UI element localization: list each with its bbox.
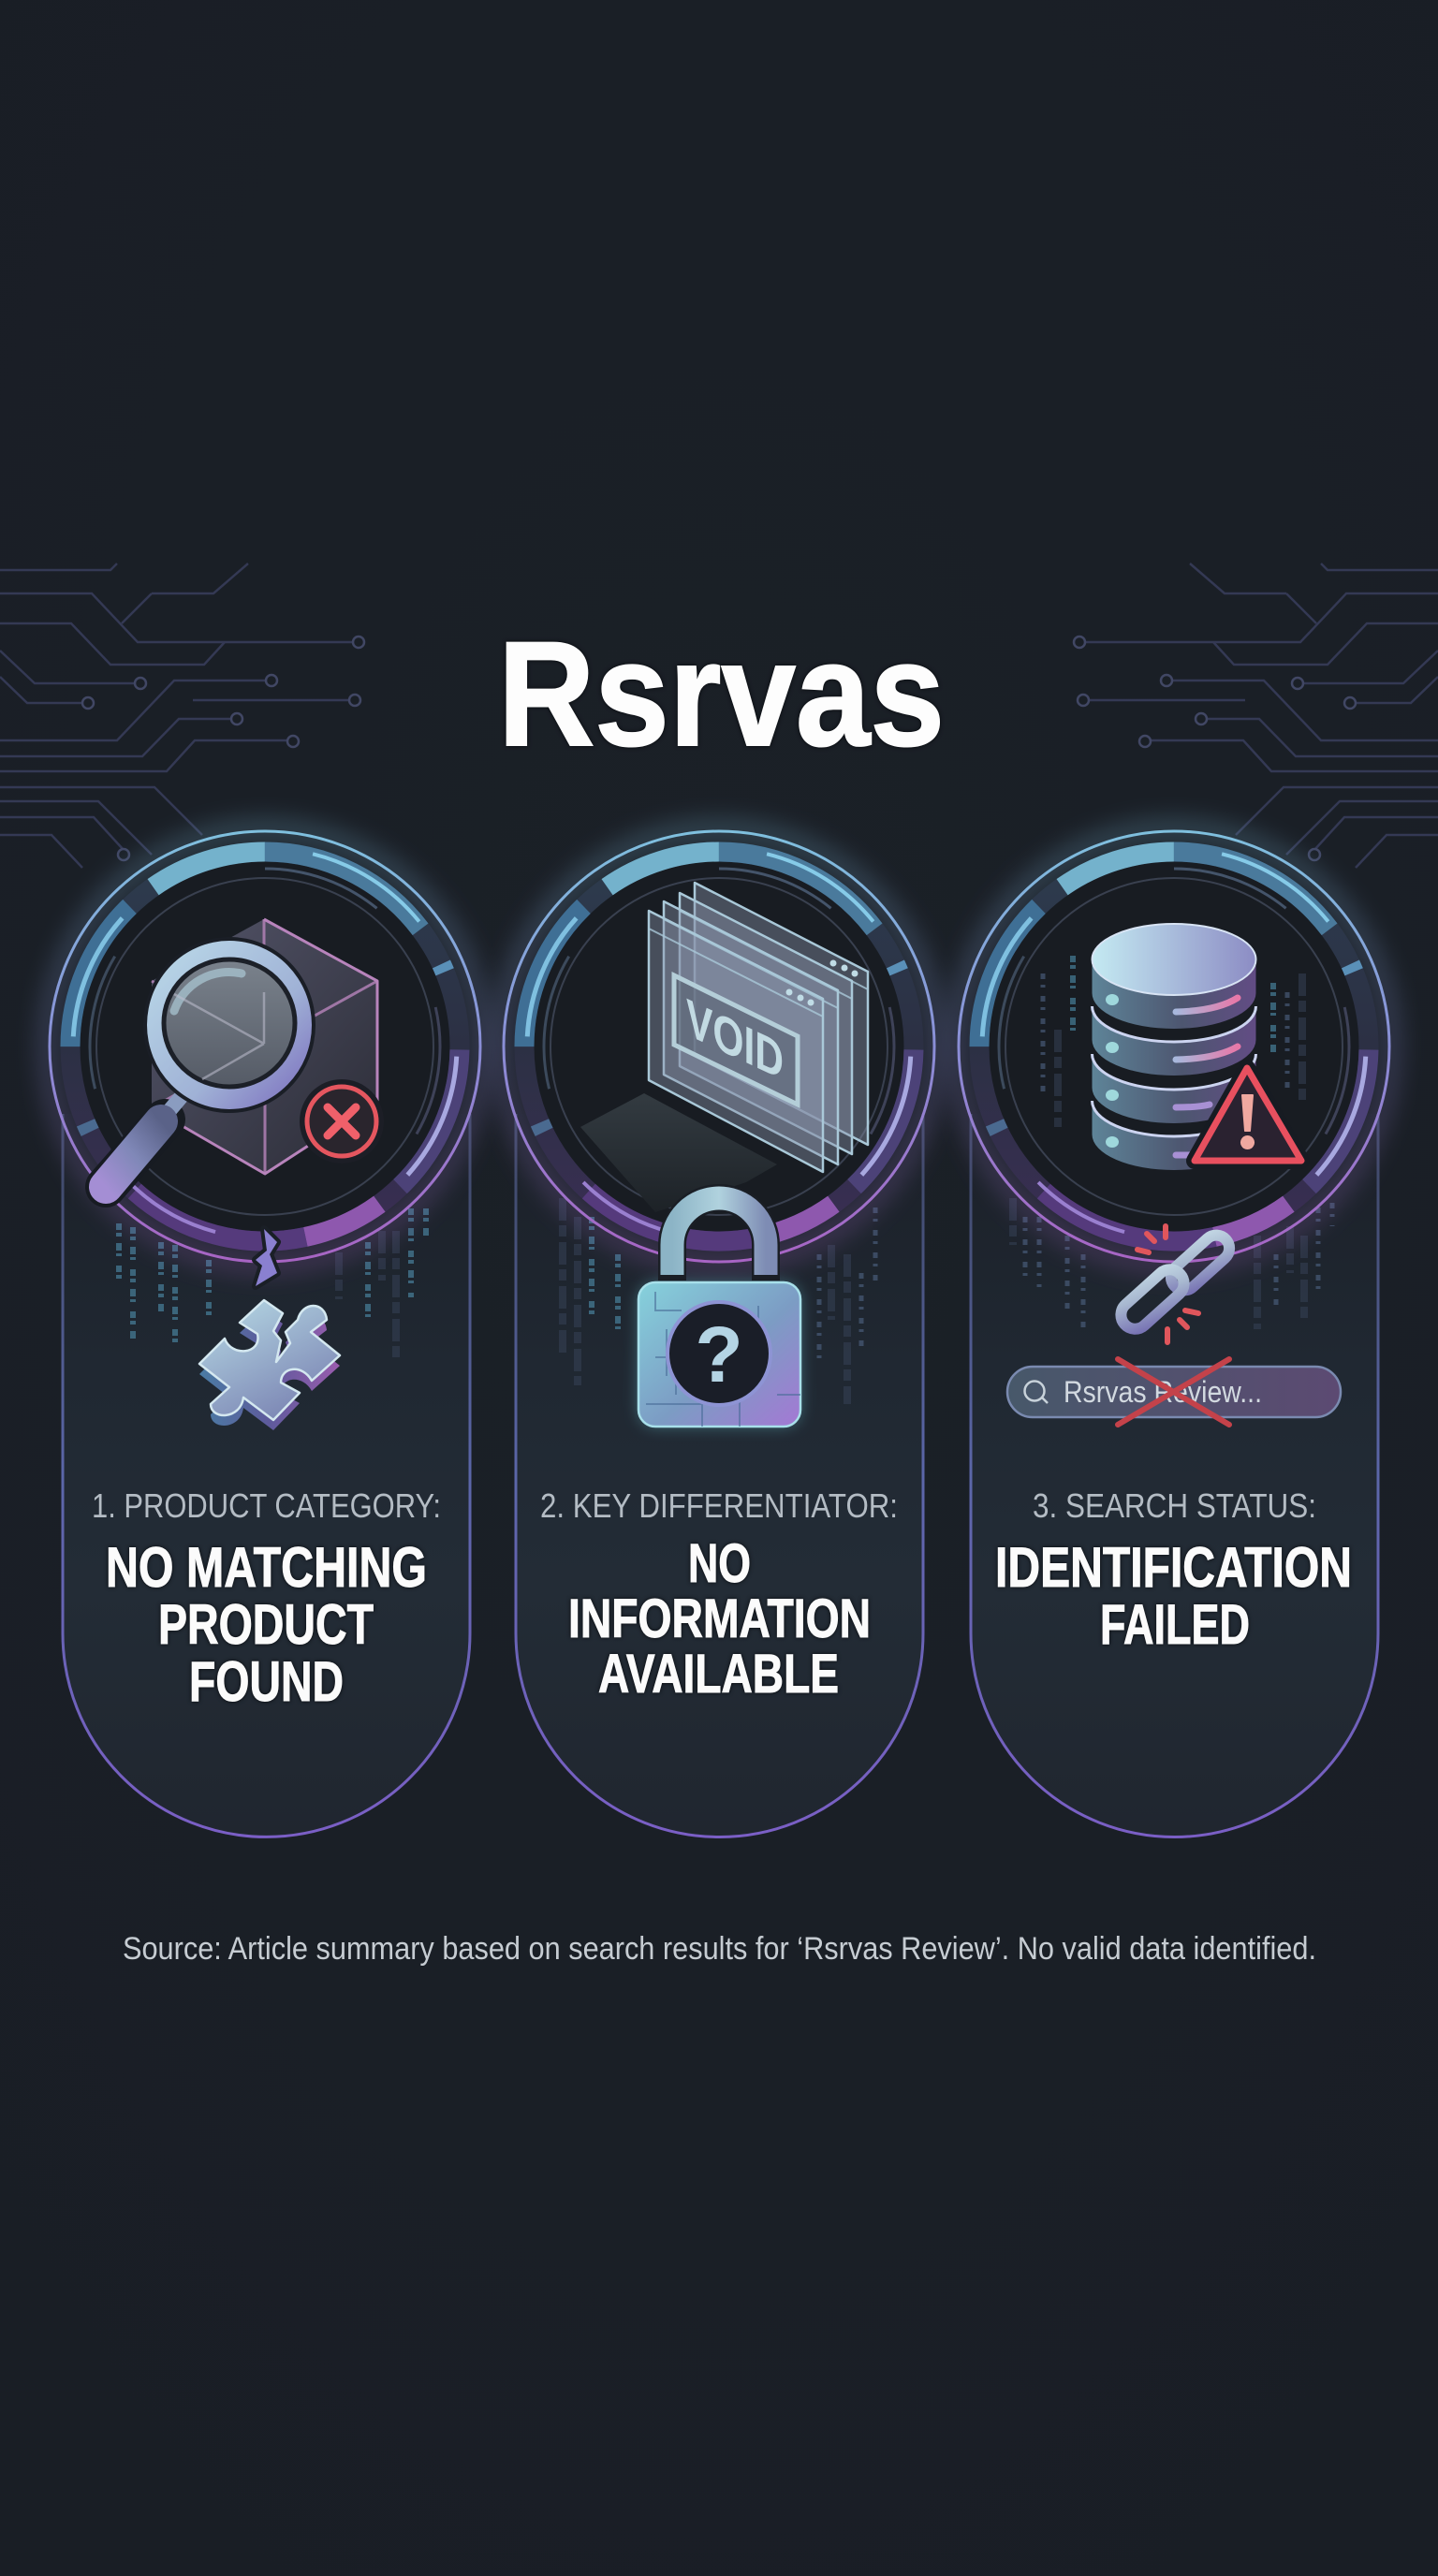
title bars xyxy=(649,900,868,1017)
value 1: FOUND xyxy=(189,1650,344,1713)
ring 1 xyxy=(0,774,537,1319)
circuit pattern xyxy=(646,1292,800,1427)
value 1: PRODUCT xyxy=(158,1593,374,1656)
pill card 2 xyxy=(516,1114,923,1837)
panel: search status xyxy=(902,774,1438,1837)
question disc xyxy=(668,1302,770,1405)
exclamation mark xyxy=(1241,1095,1254,1149)
value 1: NO MATCHING xyxy=(106,1536,427,1599)
pill card 1 xyxy=(63,1114,470,1837)
label 3: 3. SEARCH STATUS: xyxy=(1033,1486,1316,1525)
ring 3 xyxy=(902,774,1438,1319)
icon: padlock with question mark xyxy=(638,1198,800,1427)
title: Rsrvas xyxy=(498,610,945,777)
database disc 3 xyxy=(1092,1054,1256,1123)
upper link xyxy=(1166,1230,1235,1295)
circuit traces: left xyxy=(0,564,364,868)
database top xyxy=(1092,924,1256,995)
lower link xyxy=(1115,1264,1190,1335)
search query: Rsrvas Review... xyxy=(1064,1375,1262,1409)
data rain 1 xyxy=(119,1208,426,1358)
status lights xyxy=(1106,994,1119,1148)
database disc 2 xyxy=(1092,1006,1256,1076)
data rain 2 xyxy=(563,1198,875,1404)
status bars xyxy=(1176,998,1238,1060)
ring 2 xyxy=(447,774,991,1319)
warning triangle xyxy=(1195,1068,1301,1161)
value 2 xyxy=(568,1533,871,1705)
pill card 3 xyxy=(971,1114,1378,1837)
search bar xyxy=(1007,1359,1341,1425)
front pane xyxy=(649,911,823,1172)
icon: lightning crack xyxy=(256,1229,277,1286)
data rain 3 xyxy=(1013,1198,1332,1329)
icon: puzzle piece xyxy=(199,1300,340,1430)
red cross xyxy=(1118,1359,1229,1425)
label 2: 2. KEY DIFFERENTIATOR: xyxy=(540,1486,898,1525)
icon: void windows xyxy=(580,883,868,1212)
magnifier xyxy=(106,937,315,1187)
value 3 xyxy=(995,1536,1352,1656)
database disc 1 xyxy=(1092,959,1256,1029)
value 3: IDENTIFICATION xyxy=(995,1536,1352,1599)
floor shadow xyxy=(580,1093,777,1212)
icon: database with warning xyxy=(1092,924,1301,1170)
lock body xyxy=(638,1282,800,1427)
panel: product category xyxy=(0,774,537,1837)
database disc 4 xyxy=(1092,1101,1256,1170)
search icon xyxy=(1024,1382,1048,1403)
data rain inside ring xyxy=(1043,956,1302,1127)
void text: VOID xyxy=(686,988,784,1091)
error badge xyxy=(300,1079,384,1164)
back pane xyxy=(695,883,868,1145)
value 3: FAILED xyxy=(1100,1593,1250,1656)
circuit traces: right xyxy=(1074,564,1438,868)
icon: broken chain xyxy=(1115,1226,1235,1342)
window pane xyxy=(680,893,852,1154)
window pane xyxy=(664,901,838,1164)
label 1: 1. PRODUCT CATEGORY: xyxy=(92,1486,441,1525)
value 2: AVAILABLE xyxy=(598,1644,839,1705)
cube xyxy=(152,919,377,1174)
value 1 xyxy=(106,1536,427,1713)
disc edges xyxy=(1092,1006,1256,1136)
void stamp xyxy=(674,975,798,1105)
question mark: ? xyxy=(695,1310,743,1398)
shackle xyxy=(672,1198,766,1281)
value 2: INFORMATION xyxy=(568,1588,871,1649)
panel: key differentiator xyxy=(447,774,991,1837)
value 2: NO xyxy=(688,1533,751,1594)
sparks xyxy=(1137,1226,1198,1342)
icon: cube with magnifier and error badge xyxy=(106,919,384,1187)
source note: Source: Article summary based on search results for ‘Rsrvas Review’. No valid data identified. xyxy=(123,1931,1316,1967)
window dots xyxy=(786,960,858,1005)
